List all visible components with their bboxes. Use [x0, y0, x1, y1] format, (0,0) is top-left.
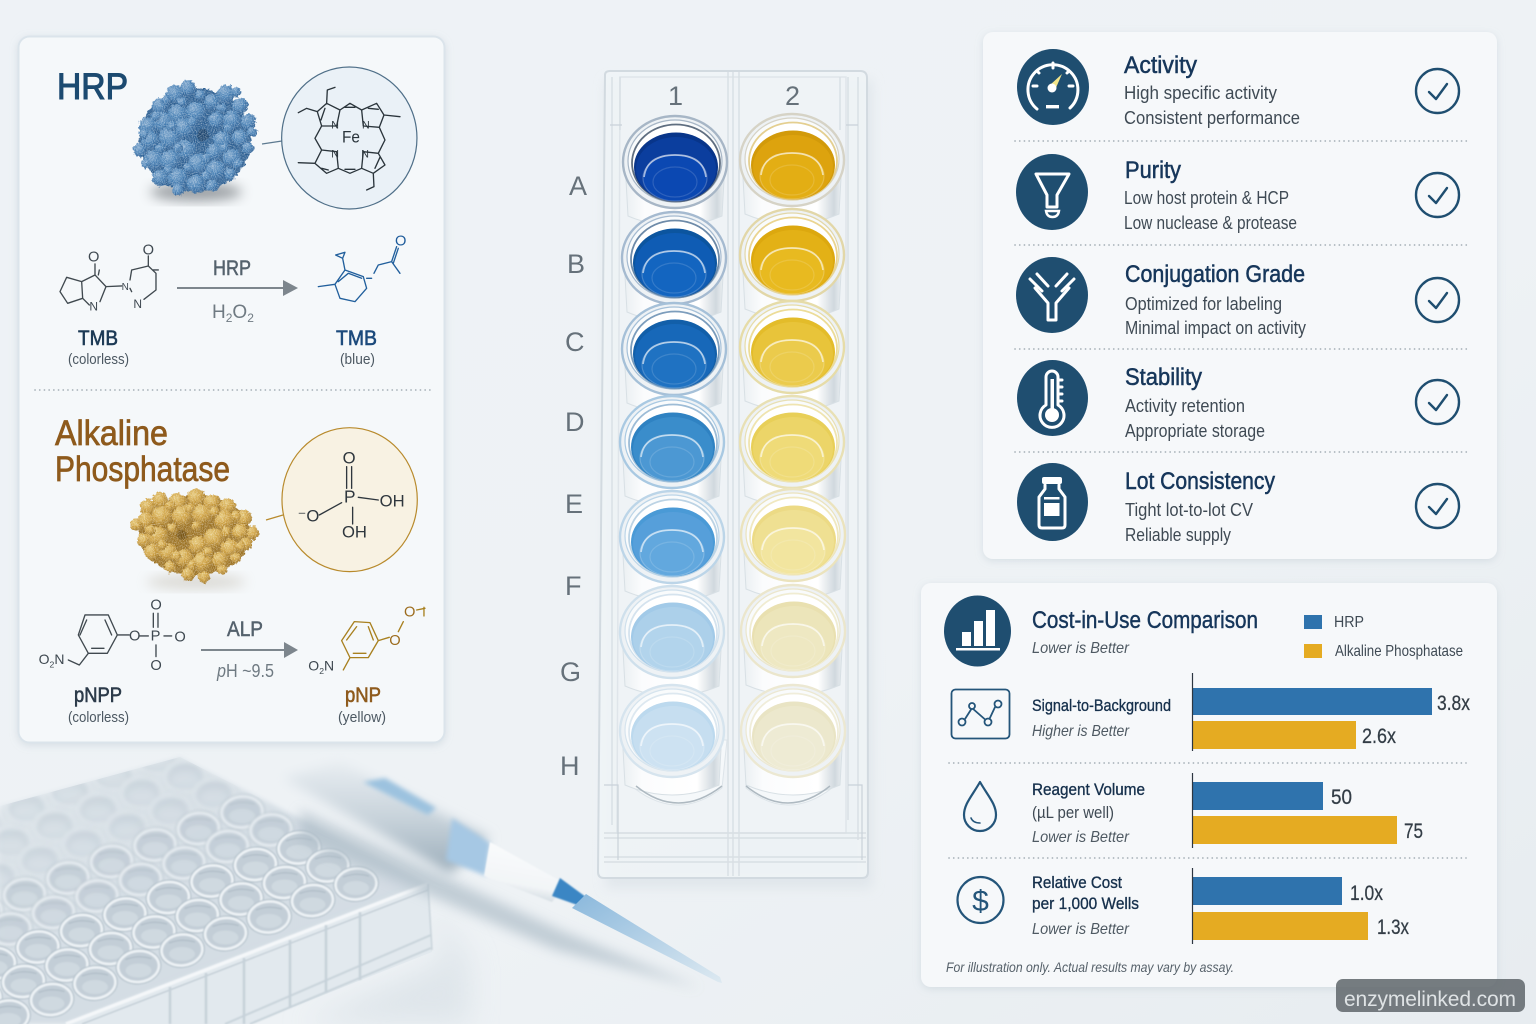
- pipette body (blurred): [283, 762, 490, 874]
- TMB colorless structure: [60, 242, 158, 314]
- reaction arrow: HRP: 2: [226, 311, 233, 325]
- icon: gauge: [1017, 49, 1089, 125]
- pNP structure: N: [324, 658, 334, 674]
- row: Stability: [1017, 360, 1459, 441]
- heading: HRP: HRP: [57, 66, 128, 107]
- label: pNPP colorless: pNPP: [74, 684, 122, 707]
- label: TMB blue: TMB: [336, 327, 377, 350]
- TMB blue structure: O: [395, 234, 406, 250]
- phosphate structure: OH: [342, 522, 367, 541]
- far wells (out of focus): [0, 758, 231, 890]
- bars: [1192, 868, 1409, 944]
- row: Lot Consistency: [1017, 463, 1459, 545]
- pNP structure: O: [389, 633, 401, 649]
- heme structure: N: [331, 119, 339, 131]
- phosphate structure: OH: [380, 492, 405, 511]
- label: TMB colorless: [68, 327, 129, 368]
- text: Lot Consistency: [1125, 468, 1275, 545]
- reaction arrow: HRP: H: [212, 302, 226, 323]
- heading: Alkaline Phosphatase: Alkaline: [55, 414, 168, 453]
- reaction arrow: HRP: HRP: [213, 257, 251, 280]
- protein: alkaline phosphatase: [130, 489, 259, 589]
- leader line: [262, 141, 282, 144]
- pNPP structure: O: [129, 629, 140, 645]
- label: Lower is Better: [1032, 921, 1130, 938]
- label: Reagent Volume: [1032, 780, 1145, 799]
- label: [1032, 696, 1171, 740]
- text: Activity: High specific activity: [1124, 83, 1277, 103]
- text: Conjugation Grade: Conjugation Grade: [1125, 261, 1305, 288]
- upper blue streak: [363, 778, 436, 815]
- text: Stability: [1125, 364, 1265, 441]
- pipette: [283, 762, 722, 988]
- text: Stability: Appropriate storage: [1125, 421, 1265, 441]
- label: per 1,000 Wells: [1032, 894, 1139, 913]
- white section: [484, 842, 566, 902]
- pNPP structure: P: [151, 629, 160, 645]
- text: Activity: [1124, 52, 1300, 128]
- row labels: A: [569, 171, 587, 201]
- panel background: [921, 583, 1497, 987]
- check mark: [1416, 278, 1459, 322]
- panel background: [18, 36, 444, 742]
- panel: enzyme quality attributes: [983, 32, 1497, 559]
- blue collar: [552, 878, 590, 906]
- row labels: E: [565, 489, 583, 519]
- heme structure: N: [361, 148, 369, 160]
- row: reagent volume: [964, 773, 1423, 848]
- reaction arrow: HRP: [177, 257, 298, 325]
- heme structure: Fe: [342, 128, 360, 147]
- column labels: 2: [785, 81, 800, 111]
- TMB colorless structure: N: [89, 300, 98, 314]
- column labels: [668, 81, 800, 111]
- bars: 50: [1331, 786, 1352, 809]
- plate front edges: [66, 884, 432, 1024]
- icon: bar chart: [944, 596, 1011, 666]
- row: Purity: [1016, 154, 1459, 233]
- label: [1032, 780, 1145, 846]
- wells: ALP column: [740, 114, 845, 795]
- leader line: [266, 515, 283, 520]
- TMB blue structure: [318, 234, 406, 302]
- phosphate structure: [282, 428, 417, 572]
- pNPP structure: O: [150, 658, 162, 674]
- bars: 3.8x: [1437, 692, 1470, 715]
- phosphate structure: ⁻O: [298, 507, 319, 526]
- bars: 1.0x: [1350, 882, 1383, 905]
- reaction arrow: HRP: 2: [247, 311, 254, 325]
- row: Conjugation Grade: [1016, 257, 1459, 338]
- bars: [1192, 673, 1470, 751]
- plate shadow: [300, 900, 470, 1024]
- label: pNPP colorless: (colorless): [68, 709, 129, 726]
- row: signal-to-background: [952, 673, 1470, 751]
- label: TMB colorless: TMB: [78, 327, 118, 350]
- heme structure: N: [331, 148, 339, 160]
- check mark: [1416, 380, 1459, 424]
- strip shadow: [606, 80, 872, 888]
- label: pNPP colorless: [68, 684, 129, 726]
- front wells: [0, 828, 380, 1024]
- text: Activity: Consistent performance: [1124, 108, 1300, 128]
- pNP structure: O: [308, 658, 319, 674]
- glass bases of bottom wells: [626, 740, 842, 805]
- label: TMB colorless: (colorless): [68, 351, 129, 368]
- panel background: [983, 32, 1497, 559]
- watermark: [1336, 979, 1525, 1012]
- row: relative cost: [958, 868, 1409, 944]
- text: Lot Consistency: Lot Consistency: [1125, 468, 1275, 495]
- TMB colorless structure: O: [143, 242, 154, 258]
- icon: vial: [1017, 463, 1088, 541]
- 2-column assay strip plate: [560, 71, 872, 888]
- icon: dollar: [958, 877, 1004, 923]
- phosphate structure: P: [344, 487, 356, 507]
- well bases: [636, 786, 830, 803]
- reaction arrow: ALP: ALP: [227, 618, 263, 641]
- legend: [1304, 614, 1463, 660]
- plate side wall: [66, 884, 432, 1024]
- text: Conjugation Grade: [1125, 261, 1306, 338]
- wells: HRP column: [620, 116, 727, 795]
- protein: HRP: [133, 80, 257, 201]
- plate top surface: [0, 757, 428, 1024]
- label: (µL per well): [1032, 803, 1114, 822]
- heading: Lower is Better: [1032, 640, 1130, 657]
- icon: thermometer: [1017, 360, 1088, 436]
- heading: Cost-in-Use Comparison: [1032, 607, 1258, 634]
- check mark: [1416, 69, 1459, 113]
- row labels: F: [565, 571, 582, 601]
- row labels: H: [560, 751, 580, 781]
- reaction arrow: ALP: pH ~9.5: [216, 661, 274, 681]
- row labels: C: [565, 327, 584, 357]
- bars: 2.6x: [1362, 725, 1396, 748]
- pipette shadow: [300, 810, 700, 988]
- text: Purity: Purity: [1125, 157, 1181, 184]
- label: Higher is Better: [1032, 723, 1130, 740]
- bars: [1192, 773, 1423, 848]
- text: Stability: Stability: [1125, 364, 1202, 391]
- heme structure: [282, 67, 417, 209]
- text: Stability: Activity retention: [1125, 396, 1245, 416]
- blurred 96-well plate: [0, 738, 470, 1024]
- icon: droplet: [964, 782, 996, 831]
- row labels: D: [565, 407, 584, 437]
- footnote: For illustration only. Actual results may vary by assay.: [946, 959, 1234, 975]
- heading: Alkaline Phosphatase: Phosphatase: [55, 450, 230, 489]
- TMB colorless structure: O: [88, 250, 99, 266]
- pNPP structure: [39, 597, 186, 674]
- text: Lot Consistency: Reliable supply: [1125, 525, 1231, 545]
- pNPP structure: O: [39, 651, 50, 667]
- legend: HRP: [1334, 614, 1364, 631]
- pNPP structure: 2: [50, 659, 55, 669]
- pNP structure: [308, 605, 425, 676]
- label: TMB blue: (blue): [340, 351, 375, 368]
- text: Lot Consistency: Tight lot-to-lot CV: [1125, 500, 1253, 520]
- icon: dollar: $: [972, 885, 989, 918]
- phosphate structure: O: [343, 448, 356, 467]
- label: Signal-to-Background: [1032, 696, 1171, 715]
- label: Relative Cost: [1032, 873, 1122, 892]
- TMB colorless structure: N: [122, 282, 129, 293]
- watermark: enzymelinked.com: [1344, 988, 1516, 1011]
- heading: [1032, 607, 1258, 657]
- pNP structure: O: [404, 605, 415, 621]
- icon: funnel: [1016, 154, 1088, 230]
- blue band: [446, 818, 490, 876]
- plate frame: [598, 71, 868, 878]
- label: pNP yellow: (yellow): [338, 709, 386, 726]
- pNPP structure: N: [54, 651, 64, 667]
- pNPP structure: O: [150, 597, 162, 613]
- label: pNP yellow: [338, 684, 386, 726]
- bars: 1.3x: [1377, 916, 1409, 939]
- text: Activity: Activity: [1124, 52, 1197, 79]
- row labels: [560, 171, 587, 781]
- column labels: 1: [668, 81, 683, 111]
- pNPP structure: O: [174, 630, 186, 646]
- reaction arrow: HRP: O: [232, 302, 247, 323]
- label: TMB blue: [336, 327, 377, 368]
- row labels: G: [560, 657, 581, 687]
- row labels: B: [567, 249, 585, 279]
- check mark: [1416, 173, 1459, 217]
- legend: Alkaline Phosphatase: [1335, 643, 1463, 660]
- label: [1032, 873, 1139, 938]
- text: Purity: [1124, 157, 1297, 233]
- mid wells: [0, 794, 292, 946]
- label: pNP yellow: pNP: [345, 684, 381, 707]
- heme structure: N: [362, 119, 370, 131]
- text: Purity: Low host protein & HCP: [1124, 188, 1289, 208]
- label: Lower is Better: [1032, 829, 1130, 846]
- reaction arrow: ALP: [201, 618, 298, 681]
- pNP structure: 2: [319, 666, 324, 676]
- pipette tip: [572, 894, 722, 983]
- text: Conjugation Grade: Minimal impact on activity: [1125, 318, 1306, 338]
- TMB colorless structure: N: [133, 297, 142, 311]
- check mark: [1416, 484, 1459, 528]
- heading: Alkaline Phosphatase: [55, 414, 230, 489]
- panel: enzymes: [18, 36, 444, 742]
- icon: antibody: [1016, 257, 1088, 333]
- text: Conjugation Grade: Optimized for labeling: [1125, 294, 1282, 314]
- row: Activity: [1017, 49, 1459, 128]
- text: Purity: Low nuclease & protease: [1124, 213, 1297, 233]
- panel: cost-in-use comparison: [921, 583, 1497, 987]
- bars: 75: [1404, 820, 1423, 843]
- icon: line chart: [952, 690, 1010, 738]
